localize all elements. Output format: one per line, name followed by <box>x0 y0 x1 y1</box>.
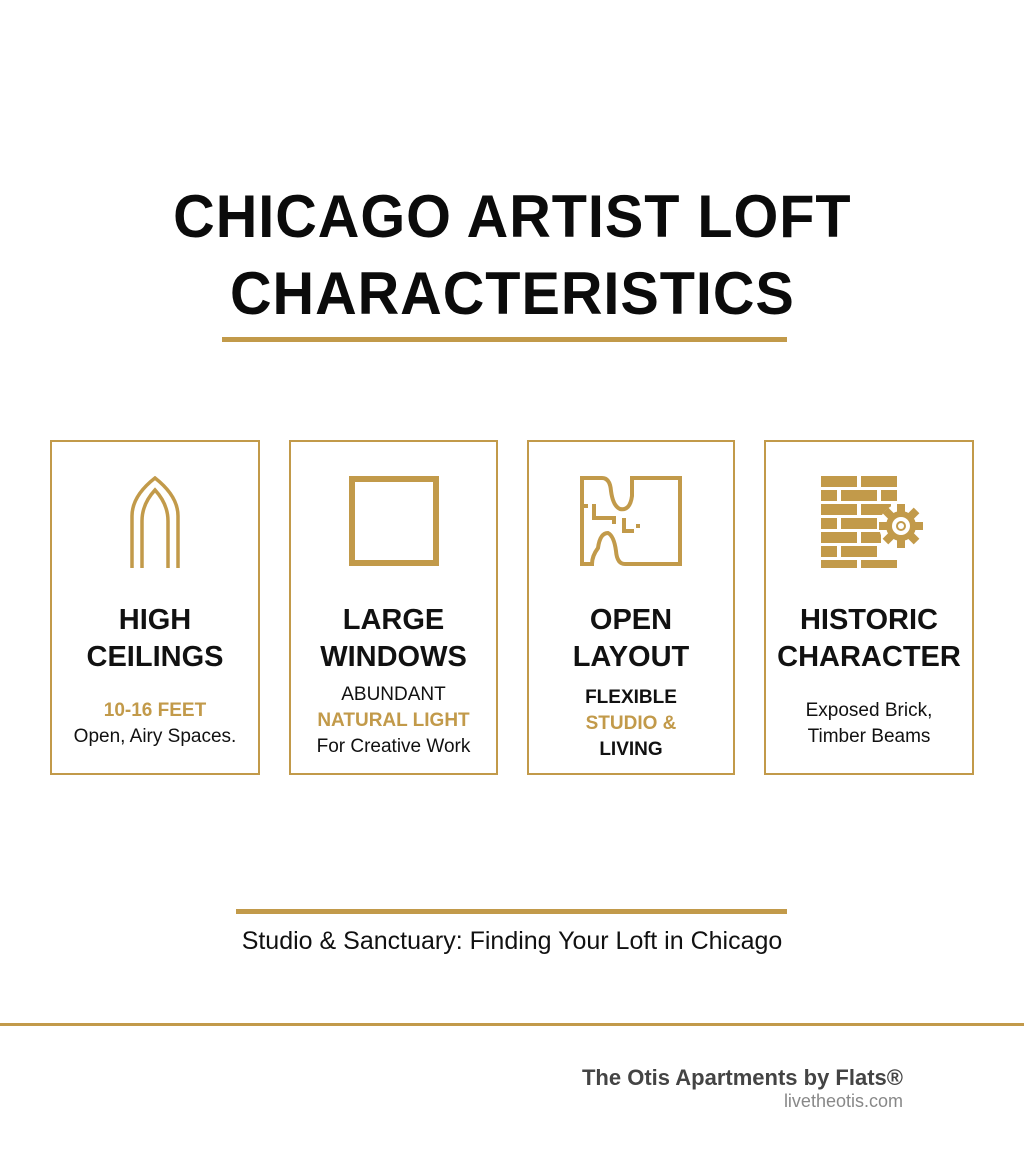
footer line <box>0 1023 1024 1026</box>
title: CHARACTERISTICS <box>230 260 794 327</box>
footer credit: The Otis Apartments by Flats® <box>582 1065 903 1090</box>
icon: brick and gear <box>821 476 923 568</box>
text: STUDIO & <box>586 713 676 734</box>
title <box>173 183 851 327</box>
icon: arch <box>130 476 180 568</box>
heading: CHARACTER <box>777 641 961 673</box>
bottom rule <box>236 909 787 914</box>
card: high ceilings <box>50 440 260 775</box>
heading <box>87 604 223 673</box>
text: Timber Beams <box>808 726 930 747</box>
heading: LARGE <box>343 604 444 636</box>
card: large windows <box>289 440 498 775</box>
text <box>317 684 470 757</box>
heading: CEILINGS <box>87 641 223 673</box>
text <box>585 687 677 760</box>
text: For Creative Work <box>317 736 470 757</box>
heading: OPEN <box>590 604 672 636</box>
text: Exposed Brick, <box>806 700 932 721</box>
heading <box>320 604 467 673</box>
text: FLEXIBLE <box>585 687 677 708</box>
text: 10-16 FEET <box>104 700 206 721</box>
footer credit: livetheotis.com <box>784 1091 903 1111</box>
heading: HISTORIC <box>800 604 938 636</box>
footer credit <box>582 1065 903 1111</box>
icon: window <box>349 476 439 566</box>
heading: LAYOUT <box>573 641 689 673</box>
text: ABUNDANT <box>341 684 446 705</box>
heading: HIGH <box>119 604 191 636</box>
subtitle: Studio & Sanctuary: Finding Your Loft in Chicago <box>242 927 782 955</box>
heading: WINDOWS <box>320 641 467 673</box>
title: CHICAGO ARTIST LOFT <box>173 183 851 250</box>
title underline <box>222 337 787 342</box>
text <box>74 700 236 747</box>
card: historic character <box>764 440 974 775</box>
heading <box>777 604 961 673</box>
heading <box>573 604 689 673</box>
icon: floor plan <box>580 476 682 566</box>
text <box>806 700 932 747</box>
card: open layout <box>527 440 735 775</box>
text: NATURAL LIGHT <box>317 710 470 731</box>
text: LIVING <box>599 739 663 760</box>
text: Open, Airy Spaces. <box>74 726 236 747</box>
